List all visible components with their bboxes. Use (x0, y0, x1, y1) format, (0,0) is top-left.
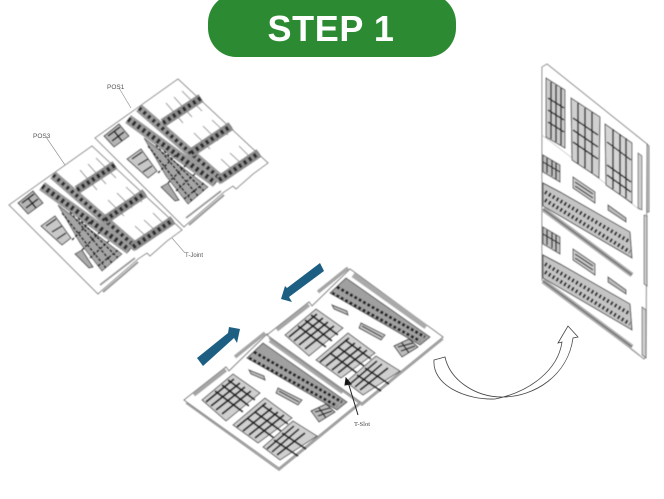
arrow: blue slide left (281, 263, 324, 302)
label POS1: POS1 (107, 84, 125, 91)
label T-Slot: T-Slot (354, 421, 370, 428)
arrow: blue slide right (197, 327, 240, 366)
plate POS3 (9, 146, 182, 294)
lower panel set A (543, 155, 632, 275)
leader line POS1 (119, 88, 131, 108)
label POS3: POS3 (33, 133, 51, 140)
side rails (638, 144, 649, 358)
title pill (208, 0, 456, 57)
title text: STEP 1 (268, 8, 394, 49)
arrow: curved rotation (434, 326, 578, 399)
figure: plates stood upright (542, 64, 649, 359)
lower panel set B (543, 227, 632, 347)
upper plate (267, 268, 443, 405)
lower plate (184, 333, 360, 470)
plate POS1 (95, 79, 268, 227)
leader line T-Joint (172, 238, 185, 253)
label T-Joint: T-Joint (185, 253, 203, 259)
upper panel blocks (546, 78, 632, 203)
arrow: T-slot pointer (345, 378, 358, 415)
figure: two plates with T-joint (9, 79, 268, 294)
figure: plates with T-slot (184, 268, 443, 470)
leader line POS3 (46, 137, 65, 165)
